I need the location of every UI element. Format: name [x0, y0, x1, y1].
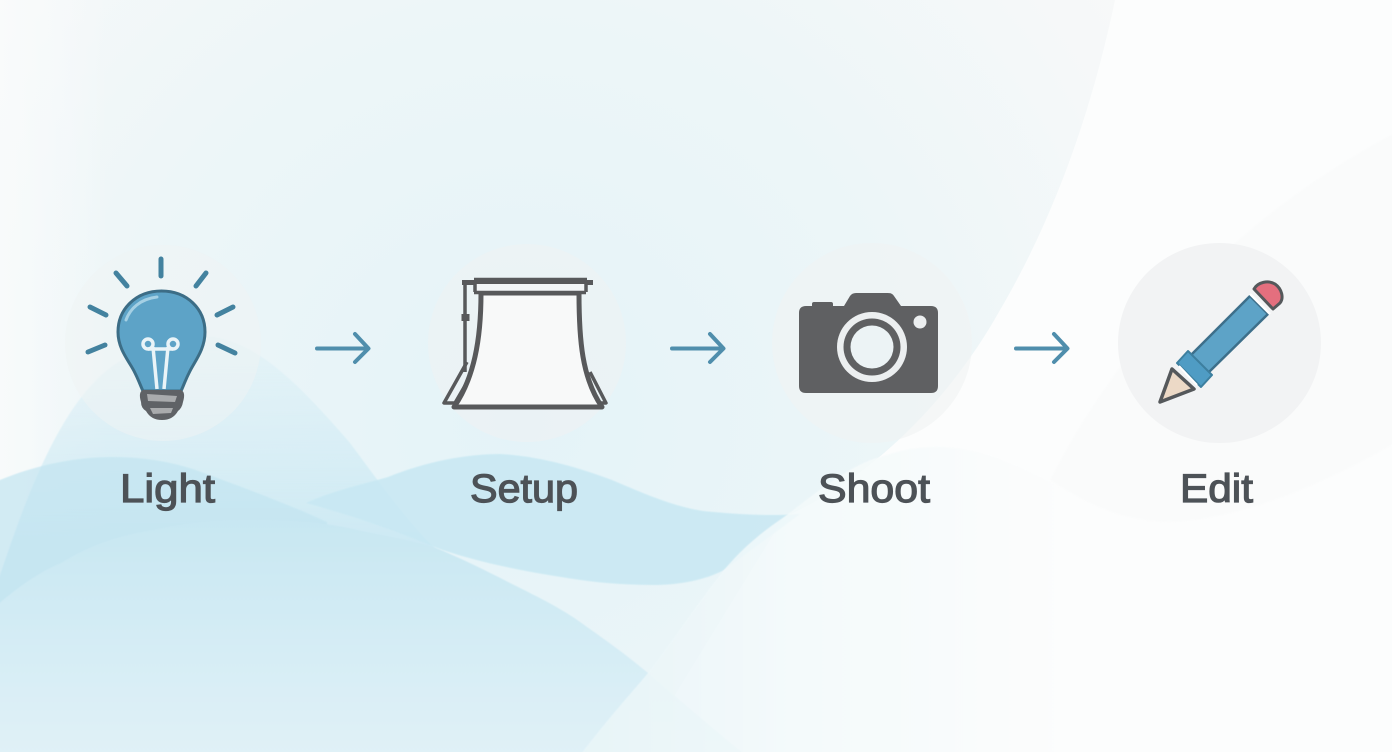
step 3: Shoot — [772, 243, 972, 511]
arrow: shoot to edit — [1016, 334, 1068, 362]
step 2: Setup — [428, 244, 626, 511]
arrow: light to setup — [317, 334, 368, 362]
label: Edit: Edit — [1180, 467, 1253, 511]
step 4: Edit — [1118, 243, 1321, 511]
label: Shoot: Shoot — [818, 467, 930, 511]
icon backdrop: edit — [1118, 243, 1321, 443]
label: Light: Light — [120, 467, 215, 511]
icon backdrop: light — [65, 245, 261, 441]
label: Setup: Setup — [470, 467, 578, 511]
icon backdrop: setup — [428, 244, 626, 442]
icon: light bulb — [88, 259, 235, 420]
step 1: Light — [65, 245, 261, 511]
icon: camera — [799, 293, 938, 393]
icon: backdrop stand — [444, 280, 606, 407]
icon backdrop: shoot — [772, 243, 972, 443]
arrow: setup to shoot — [672, 334, 724, 362]
icon: pencil — [1160, 282, 1282, 402]
